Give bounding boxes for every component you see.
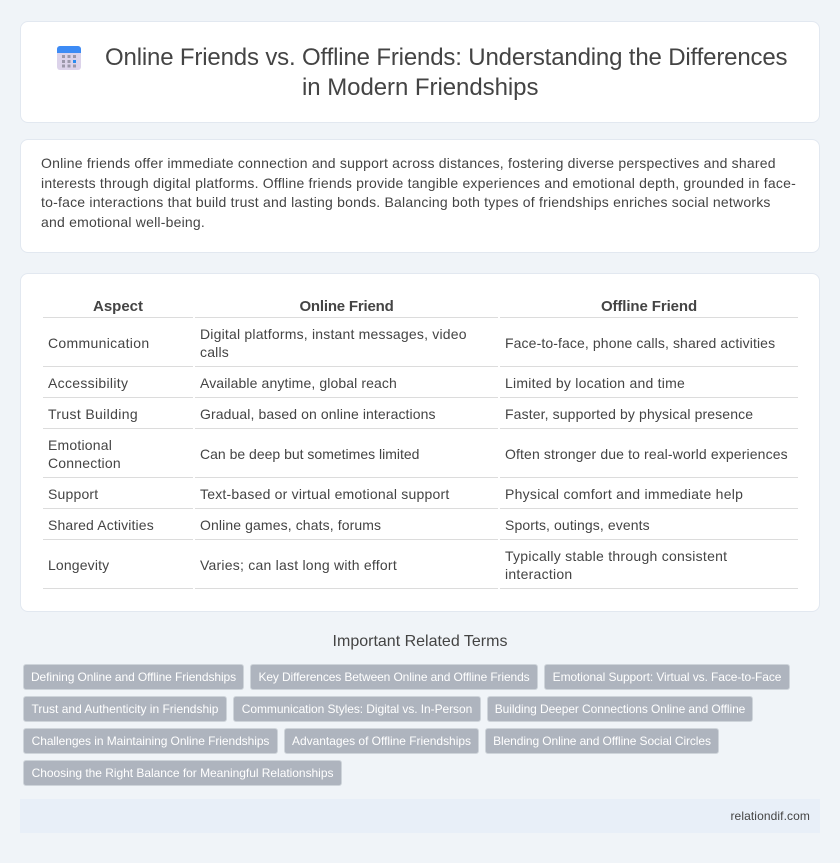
icon: calendar bbox=[57, 46, 81, 70]
table header: Online Friend bbox=[299, 298, 394, 315]
title: in Modern Friendships bbox=[302, 74, 538, 101]
footer bar bbox=[20, 799, 820, 833]
row: longevity: interaction bbox=[505, 566, 572, 582]
row: shared activities bbox=[48, 517, 650, 533]
row: emotional connection: Often stronger due to real-world experiences bbox=[505, 446, 788, 462]
tag: Key Differences Between Online and Offline Friends bbox=[258, 670, 530, 684]
row: longevity: Varies; can last long with effort bbox=[200, 557, 397, 573]
tag: Choosing the Right Balance for Meaningful Relationships bbox=[32, 766, 333, 780]
tag bbox=[233, 696, 481, 722]
row: shared activities: Shared Activities bbox=[48, 517, 154, 533]
tag: Emotional Support: Virtual vs. Face-to-Face bbox=[553, 670, 781, 684]
footer source: relationdif.com bbox=[730, 809, 810, 823]
tag: Blending Online and Offline Social Circles bbox=[493, 734, 711, 748]
row: support: Support bbox=[48, 486, 98, 502]
title card bbox=[20, 21, 820, 123]
tag bbox=[487, 696, 753, 722]
row: accessibility: Available anytime, global reach bbox=[200, 375, 397, 391]
comparison table panel bbox=[20, 273, 820, 612]
row: support: Text-based or virtual emotional support bbox=[200, 486, 449, 502]
related terms heading: Important Related Terms bbox=[333, 633, 507, 650]
intro text: interests through digital platforms. Offline friends provide tangible experiences and emotional depth, grounded in face- bbox=[41, 174, 796, 190]
row: communication bbox=[48, 326, 775, 360]
tag: Trust and Authenticity in Friendship bbox=[32, 702, 218, 716]
row: emotional connection bbox=[48, 437, 788, 471]
row: support: Physical comfort and immediate help bbox=[505, 486, 743, 502]
row: trust building: Trust Building bbox=[48, 406, 138, 422]
tag bbox=[544, 664, 790, 690]
row: accessibility bbox=[48, 375, 685, 391]
table header: Aspect bbox=[93, 298, 143, 315]
row: support bbox=[48, 486, 743, 502]
tag bbox=[23, 760, 342, 786]
intro text: and emotional well-being. bbox=[41, 214, 205, 230]
tag: Building Deeper Connections Online and Offline bbox=[495, 702, 745, 716]
row: emotional connection: Can be deep but sometimes limited bbox=[200, 446, 419, 462]
row: trust building bbox=[48, 406, 753, 422]
intro panel bbox=[20, 139, 820, 253]
tag bbox=[485, 728, 719, 754]
intro text bbox=[41, 155, 796, 230]
tag bbox=[23, 664, 244, 690]
tag: Communication Styles: Digital vs. In-Person bbox=[242, 702, 472, 716]
row: shared activities: Online games, chats, forums bbox=[200, 517, 381, 533]
tag bbox=[23, 696, 227, 722]
row: emotional connection: Emotional bbox=[48, 437, 112, 453]
title bbox=[105, 44, 787, 101]
tag: Challenges in Maintaining Online Friendships bbox=[32, 734, 269, 748]
intro text: Online friends offer immediate connection and support across distances, fostering diverse perspectives and shared bbox=[41, 155, 776, 171]
table header bbox=[93, 298, 697, 315]
tag: Defining Online and Offline Friendships bbox=[31, 670, 236, 684]
row: shared activities: Sports, outings, events bbox=[505, 517, 650, 533]
row: longevity: Longevity bbox=[48, 557, 109, 573]
row: longevity bbox=[48, 548, 727, 582]
table header: Offline Friend bbox=[601, 298, 697, 315]
row: communication: Communication bbox=[48, 335, 149, 351]
intro text: to-face interactions that build trust and lasting bonds. Balancing both types of friendships enriches social networks bbox=[41, 194, 771, 210]
row: longevity: Typically stable through consistent bbox=[505, 548, 727, 564]
tag: Advantages of Offline Friendships bbox=[292, 734, 471, 748]
row: communication: Digital platforms, instant messages, video bbox=[200, 326, 467, 342]
row: trust building: Gradual, based on online interactions bbox=[200, 406, 436, 422]
tag bbox=[23, 728, 278, 754]
related terms tags bbox=[23, 664, 790, 786]
tag bbox=[284, 728, 479, 754]
title: Online Friends vs. Offline Friends: Understanding the Differences bbox=[105, 44, 787, 71]
row: emotional connection: Connection bbox=[48, 455, 121, 471]
row: accessibility: Limited by location and time bbox=[505, 375, 685, 391]
row: communication: calls bbox=[200, 344, 229, 360]
row: trust building: Faster, supported by physical presence bbox=[505, 406, 753, 422]
tag bbox=[250, 664, 538, 690]
row: communication: Face-to-face, phone calls, shared activities bbox=[505, 335, 775, 351]
row: accessibility: Accessibility bbox=[48, 375, 128, 391]
